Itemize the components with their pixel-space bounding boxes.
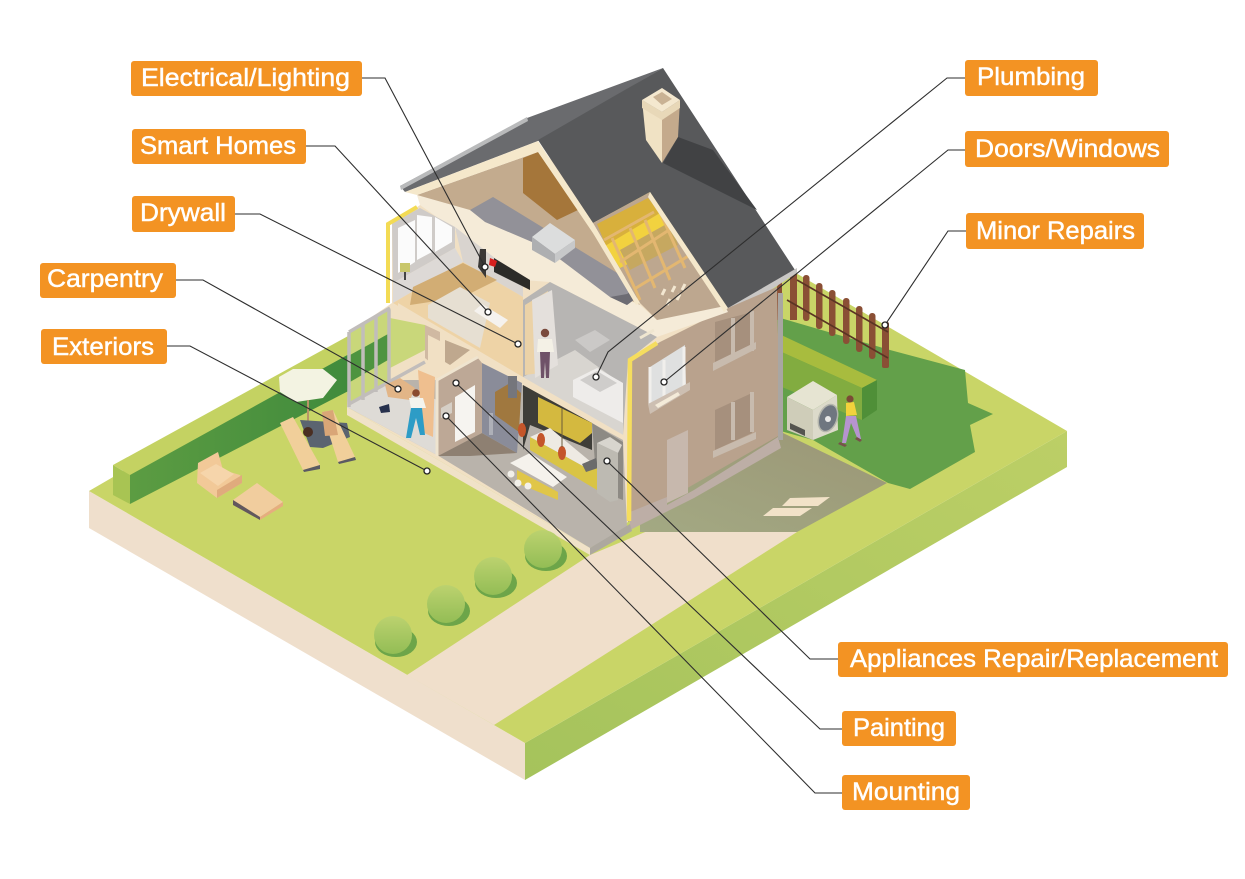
outdoor table <box>233 483 283 520</box>
side door <box>667 430 688 503</box>
label: Plumbing: Plumbing <box>977 63 1085 91</box>
leader: Drywall <box>235 214 521 347</box>
lounge chairs <box>280 410 356 472</box>
label: Mounting: Mounting <box>852 778 960 806</box>
sunroom frames <box>349 308 470 407</box>
armchair <box>197 452 242 498</box>
house shadow on back lawn <box>777 317 993 489</box>
label: Minor Repairs: Minor Repairs <box>976 217 1135 245</box>
leader: Exteriors <box>167 346 430 474</box>
wall panel being carried <box>418 370 435 437</box>
label: Electrical/Lighting <box>131 61 362 96</box>
label: Painting: Painting <box>853 714 945 742</box>
ceiling slab <box>417 195 728 337</box>
label: Doors/Windows: Doors/Windows <box>975 135 1160 163</box>
label: Minor Repairs <box>966 213 1144 249</box>
label: Electrical/Lighting: Electrical/Lighting <box>141 64 350 92</box>
fence <box>776 274 889 368</box>
upper window right <box>713 311 756 371</box>
blue grey utility room <box>482 363 522 453</box>
leader: Doors/Windows <box>661 150 965 385</box>
yellow section edge main wall <box>629 343 657 521</box>
person walking outside <box>838 395 862 447</box>
roof framing and insulation <box>593 192 725 320</box>
leader: Appliances Repair/Replacement <box>604 458 838 659</box>
upper floor left room <box>392 208 530 378</box>
label: Mounting <box>842 775 970 810</box>
toolbox <box>379 404 390 413</box>
leader: Minor Repairs <box>882 231 966 328</box>
garden path <box>407 530 797 725</box>
shrub 1 <box>374 616 417 657</box>
yellow section edge upper left <box>388 207 417 303</box>
downpipe <box>778 293 783 440</box>
chimney <box>642 88 680 163</box>
label: Carpentry <box>40 263 176 298</box>
label: Painting <box>842 711 956 746</box>
patio umbrella <box>279 369 337 430</box>
outdoor air conditioner <box>787 381 841 440</box>
wall base strip <box>630 437 781 530</box>
table lamp <box>400 263 410 280</box>
attic interior <box>417 152 640 305</box>
leader: Electrical/Lighting <box>362 78 488 270</box>
leader: Plumbing <box>593 78 965 380</box>
driveway in shadow <box>640 433 887 532</box>
carpenter worker <box>406 389 426 438</box>
man in bathroom <box>537 329 554 378</box>
roof back slope <box>400 68 663 192</box>
main exterior wall <box>628 287 780 522</box>
house backdrop <box>347 150 728 548</box>
label: Plumbing <box>965 60 1098 96</box>
leader: Mounting <box>443 413 842 793</box>
gable trim <box>405 141 728 312</box>
roof gutter <box>728 268 797 316</box>
roof main slope <box>538 68 795 310</box>
kitchen <box>508 385 623 502</box>
label: Drywall <box>132 196 235 232</box>
label: Appliances Repair/Replacement: Appliances Repair/Replacement <box>850 645 1218 673</box>
label: Exteriors: Exteriors <box>52 333 154 361</box>
label: Smart Homes: Smart Homes <box>140 132 296 160</box>
label: Doors/Windows <box>965 131 1169 167</box>
leader: Smart Homes <box>306 146 491 315</box>
leader: Painting <box>453 380 842 729</box>
room with white door <box>437 357 517 456</box>
label: Drywall: Drywall <box>140 199 226 227</box>
attic ductwork <box>470 197 645 305</box>
roof chimney shadow <box>663 137 757 210</box>
bathroom <box>523 282 657 437</box>
cut lumber pile <box>385 378 415 400</box>
ground slab <box>347 380 632 555</box>
left hedge <box>113 318 425 504</box>
lower window right <box>713 392 756 458</box>
shrub 2 <box>427 585 470 626</box>
label: Exteriors <box>41 329 167 364</box>
ground platform <box>89 177 1067 780</box>
floor slab beam <box>398 303 625 445</box>
shrub 3 <box>474 557 517 598</box>
shrub 4 <box>524 530 567 571</box>
label: Carpentry: Carpentry <box>47 265 164 293</box>
upper window on section edge <box>648 345 690 414</box>
back hedge <box>777 333 877 420</box>
leader: Carpentry <box>176 280 401 392</box>
